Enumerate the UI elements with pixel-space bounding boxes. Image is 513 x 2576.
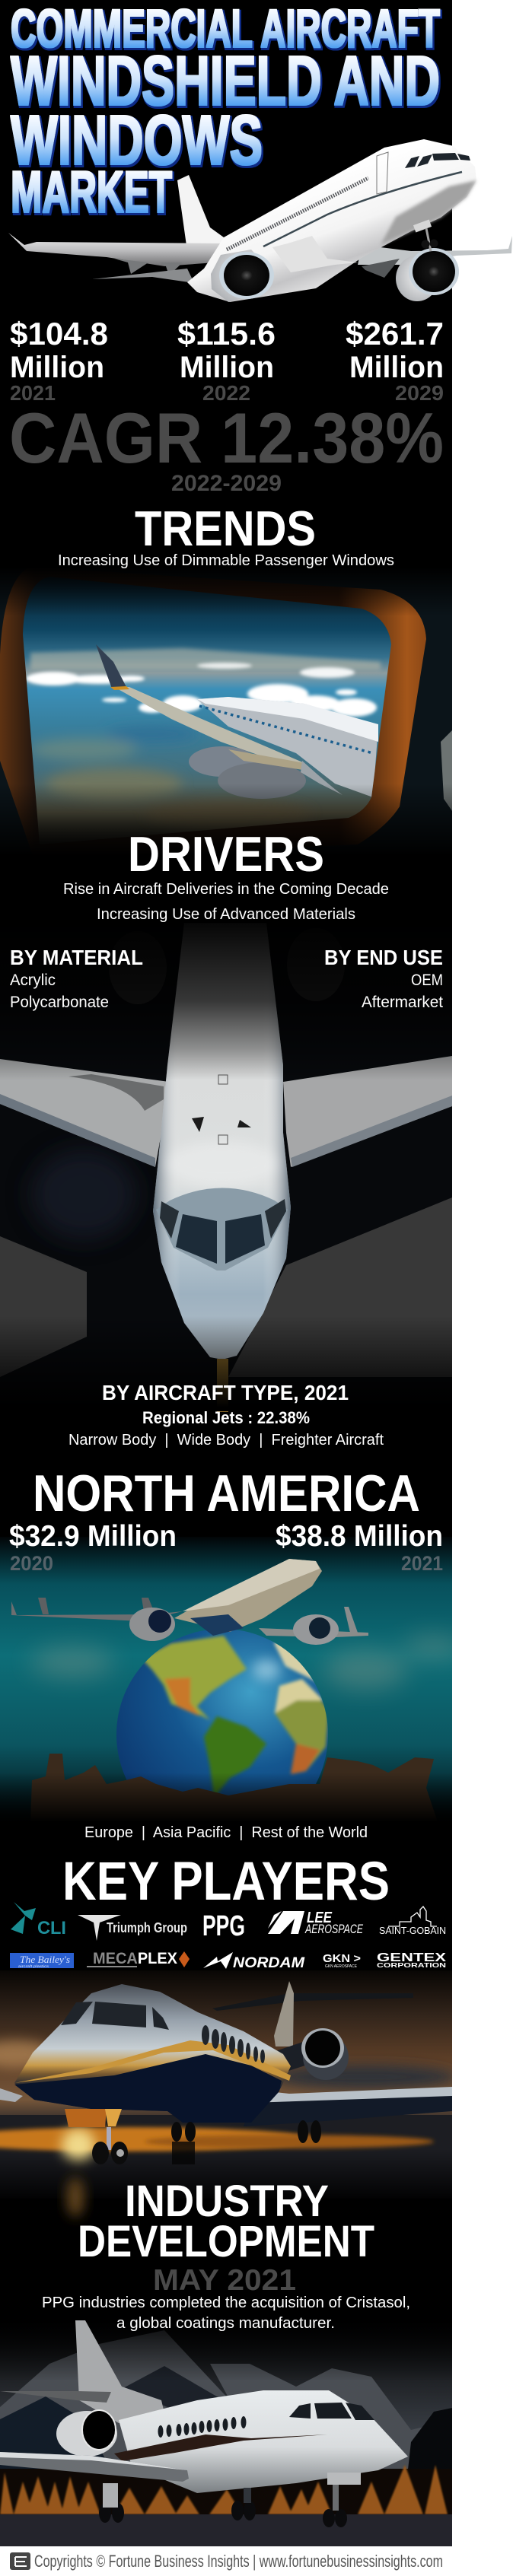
mountains: [0, 2330, 422, 2469]
jet landing gear: [99, 2473, 361, 2527]
jet windows: [61, 2002, 265, 2063]
jet wing: [269, 2087, 452, 2103]
by aircraft type: [69, 1381, 384, 1449]
by aircraft type: Narrow Body | Wide Body | Freighter Aircraft: [69, 1431, 384, 1449]
by material: Polycarbonate: [10, 994, 109, 1011]
north america 2020: $32.9 Million: [9, 1520, 177, 1553]
by material: BY MATERIAL: [10, 946, 143, 969]
logo: Mecaplex: MECAPLEX: [93, 1950, 177, 1967]
by material: [10, 946, 143, 1011]
development date: MAY 2021: [153, 2264, 296, 2297]
landing gear: [65, 2109, 321, 2164]
CAGR: CAGR 12.38%: [9, 398, 444, 478]
by aircraft type: Regional Jets : 22.38%: [142, 1408, 310, 1427]
drivers text: [63, 880, 389, 923]
drivers text: Increasing Use of Advanced Materials: [97, 905, 355, 923]
footer logo: [10, 2552, 30, 2570]
logo: PPG: PPG: [202, 1910, 245, 1942]
cabin and cockpit windows: [158, 2403, 374, 2438]
north america 2021: $38.8 Million: [276, 1520, 443, 1553]
jet fuselage: [119, 2390, 408, 2493]
nose gear: [413, 220, 438, 251]
industry development heading: INDUSTRY: [125, 2177, 329, 2226]
jet wing: [0, 2452, 189, 2482]
jet fuselage: [14, 1984, 291, 2111]
logo: CLI: CLI: [37, 1918, 66, 1938]
logo: Nordam: [203, 1952, 305, 1971]
stat: 2022 market size: 2022: [202, 381, 250, 405]
development text: PPG industries completed the acquisition of Cristasol,: [42, 2294, 410, 2311]
cabin window row: [227, 178, 368, 250]
by end use: BY END USE: [324, 946, 443, 969]
stat: 2029 market size: [346, 316, 444, 405]
orange trees: [0, 2465, 448, 2514]
left engine: [211, 250, 274, 302]
near wing: [8, 233, 225, 283]
city skyline: [30, 1754, 438, 1822]
logo: Saint-Gobain: SAINT-GOBAIN: [379, 1926, 446, 1936]
airliner seen from window: [96, 644, 378, 799]
by material: Acrylic: [10, 972, 56, 989]
logo: Bailey's: The Bailey's: [20, 1954, 70, 1965]
fuselage: [187, 139, 476, 302]
logo: GKN Aerospace: GKN >: [323, 1952, 361, 1965]
logo: Bailey's: [10, 1953, 74, 1968]
jet tail and engine: [212, 1981, 413, 2080]
by aircraft type: BY AIRCRAFT TYPE, 2021: [102, 1381, 349, 1404]
illustration: business jet at sunset: [0, 1970, 457, 2217]
tail fin: [177, 175, 228, 251]
north america 2020: [9, 1520, 177, 1575]
fuselage: [153, 923, 291, 1360]
trends heading: TRENDS: [135, 501, 316, 556]
key players heading: KEY PLAYERS: [62, 1852, 390, 1912]
logo: Lee Aerospace: AEROSPACE: [304, 1922, 363, 1936]
title: MARKET: [11, 158, 172, 225]
north america 2021: 2021: [401, 1552, 443, 1575]
far wing: [358, 236, 512, 278]
development text: a global coatings manufacturer.: [116, 2314, 335, 2332]
cockpit windscreen: [156, 1188, 288, 1271]
logo: Lee Aerospace: LEE: [307, 1910, 333, 1926]
window sky view: [23, 580, 391, 837]
stat: 2021 market size: $104.8: [10, 316, 108, 351]
logo: Nordam: NORDAM: [233, 1955, 305, 1971]
stat: 2022 market size: $115.6: [177, 316, 276, 351]
right engine: [396, 248, 459, 301]
title: WINDOWS: [11, 100, 263, 180]
stat: 2029 market size: $261.7: [346, 316, 444, 351]
cockpit windows: [405, 153, 470, 168]
stat: 2022 market size: Million: [180, 351, 274, 384]
logo: Triumph Group: [78, 1915, 187, 1941]
north america heading: NORTH AMERICA: [33, 1465, 420, 1522]
regions: Europe | Asia Pacific | Rest of the World: [84, 1824, 368, 1841]
title: [11, 0, 440, 225]
industry development heading: [78, 2177, 374, 2266]
logo: Saint-Gobain: [379, 1907, 446, 1936]
airliner over globe: [11, 1559, 368, 1645]
right wing: [283, 1056, 452, 1167]
stat: 2021 market size: Million: [10, 351, 104, 384]
logo: Gentex: [377, 1951, 446, 1969]
industry development heading: DEVELOPMENT: [78, 2217, 374, 2266]
logo: CLI: [11, 1902, 66, 1938]
illustration: top view jet on tarmac: [0, 926, 452, 1412]
cheatline: [263, 172, 462, 246]
by end use: OEM: [411, 972, 443, 989]
illustration: hero airliner: [8, 139, 512, 302]
stat: 2022 market size: [177, 316, 276, 405]
stat: 2029 market size: 2029: [395, 381, 444, 405]
wing root: [272, 236, 364, 272]
jet fin and engine: [0, 2320, 164, 2423]
illustration: window view section: [0, 574, 452, 844]
logo: Lee Aerospace: [268, 1910, 363, 1936]
globe: [116, 1630, 328, 1795]
logo: Bailey's: aircraft plastics: [18, 1964, 49, 1968]
logo: Gentex: GENTEX: [377, 1951, 446, 1964]
logo: Gentex: CORPORATION: [377, 1962, 446, 1969]
cabin window frame: [0, 567, 426, 860]
north america 2020: 2020: [10, 1552, 53, 1575]
engines: [120, 997, 327, 1004]
development text: [42, 2294, 410, 2332]
logo: GKN Aerospace: GKN AEROSPACE: [325, 1964, 358, 1969]
drivers text: Rise in Aircraft Deliveries in the Coming Decade: [63, 880, 389, 898]
by end use: [324, 946, 443, 1011]
illustration: globe with airliner: [0, 1538, 452, 1815]
stat: 2021 market size: [10, 316, 108, 405]
CAGR: 2022-2029: [171, 471, 282, 496]
drivers heading: DRIVERS: [128, 826, 324, 882]
nose shading: [381, 180, 476, 245]
logo: Triumph Group: Triumph Group: [107, 1920, 187, 1935]
stat: 2021 market size: 2021: [10, 381, 56, 405]
illustration: jet with mountains: [0, 2317, 452, 2546]
north america 2021: [276, 1520, 443, 1575]
by end use: Aftermarket: [362, 994, 443, 1011]
stat: 2029 market size: Million: [349, 351, 444, 384]
trends text: Increasing Use of Dimmable Passenger Windows: [58, 552, 394, 569]
left wing: [0, 1059, 169, 1167]
